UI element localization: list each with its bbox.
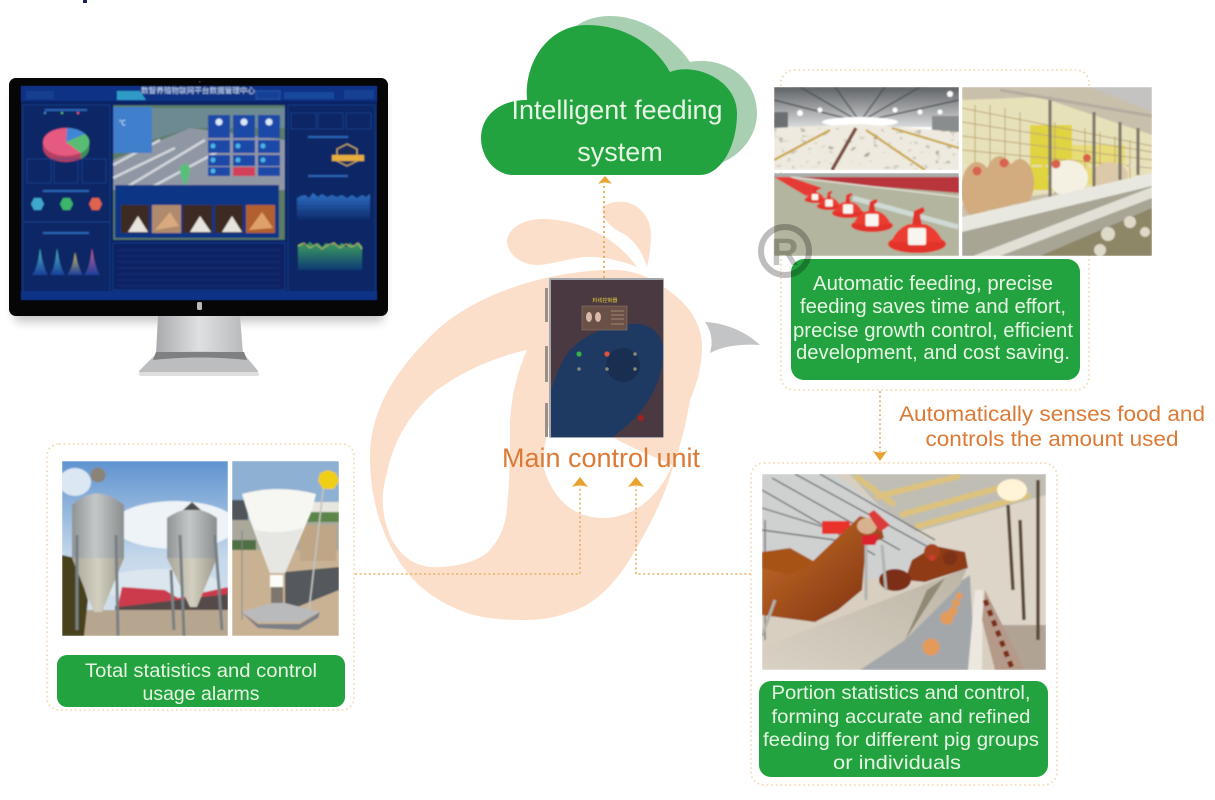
registered trademark mark: [761, 227, 809, 275]
status hexagons: [31, 198, 102, 210]
cloud: intelligent feeding system: [481, 16, 757, 175]
data table: [113, 243, 285, 290]
tile grid: [208, 115, 280, 176]
silo left: [72, 494, 124, 558]
trough: [962, 173, 1152, 232]
label: total statistics: [57, 655, 345, 707]
main control cabinet: [545, 278, 664, 445]
cloud title line 2: system: [577, 137, 663, 167]
dashboard map view: ℃: [119, 119, 126, 127]
indicators and knobs: [576, 351, 644, 421]
monitor bezel: [9, 78, 388, 316]
silo right: [167, 509, 217, 558]
connector: portion unit to main unit: [628, 477, 751, 574]
label: portion statistics: [759, 681, 1048, 777]
map pin: [180, 164, 190, 186]
photo: red pan feeders: [774, 173, 959, 256]
dashboard map view: [113, 105, 285, 240]
top-left cropped glyph: [83, 0, 87, 3]
connector: silos to main unit: [355, 477, 588, 574]
panel: automatic feeding: [774, 70, 1152, 390]
hinges: [545, 288, 548, 437]
hens: [961, 156, 1034, 218]
badge: [332, 144, 364, 166]
main control unit label: Main control unit: [502, 443, 700, 473]
pie chart: [43, 112, 89, 162]
label: automatic feeding: [791, 259, 1080, 380]
label: automatic feeding: development, and cost saving.: [796, 342, 1070, 364]
monitor stand: [139, 316, 259, 376]
connector: main unit to cloud: [598, 176, 612, 280]
monitor logo: [197, 302, 202, 310]
brand logo watermark: [370, 202, 702, 620]
sensing note: Automatically senses food and: [899, 403, 1205, 426]
area chart: [297, 193, 370, 220]
label: portion statistics: feeding for different pig groups: [763, 729, 1039, 751]
photo: hens in cages: [762, 474, 1046, 670]
label: automatic feeding: Automatic feeding, precise: [813, 273, 1053, 295]
label: total statistics: Total statistics and control: [85, 660, 317, 682]
sensing note: controls the amount used: [926, 428, 1178, 451]
photo: feed silos: [62, 461, 228, 636]
photo: dry-wet feeder: [232, 461, 339, 636]
line chart: [298, 242, 362, 270]
monitor with dashboard: [9, 78, 388, 376]
dashboard left column: [23, 105, 110, 292]
dashboard top bar: [21, 85, 377, 101]
cabinet nameplate: 料线控制器: [592, 297, 618, 304]
label: portion statistics: or individuals: [833, 752, 961, 774]
registered trademark mark: R: [771, 232, 799, 274]
photo: broiler house: [774, 87, 959, 170]
cabinet display: [582, 306, 627, 330]
panel: total statistics: [47, 444, 354, 710]
sensing note: [899, 403, 1205, 451]
peak chart: [32, 248, 100, 275]
label: automatic feeding: precise growth control, efficient: [793, 320, 1073, 342]
cage wire: [762, 474, 935, 580]
hen group: [762, 510, 968, 622]
egg trough: [860, 575, 975, 670]
screen: [21, 86, 377, 300]
cloud title: Intelligent feeding: [512, 95, 722, 125]
label: total statistics: usage alarms: [142, 683, 260, 705]
label: portion statistics: forming accurate and refined: [772, 706, 1030, 728]
label: portion statistics: Portion statistics and control,: [772, 682, 1030, 704]
camera panel: [115, 185, 279, 238]
dashboard top bar: 数智养殖物联网平台数据管理中心: [141, 85, 255, 95]
connector: feeding to portion: [873, 391, 887, 461]
stat boxes: [27, 159, 106, 183]
photo: laying hen cages: [962, 87, 1152, 256]
label: automatic feeding: feeding saves time and effort,: [800, 296, 1066, 318]
panel: portion statistics: [751, 463, 1057, 785]
grey crescent mark: [705, 322, 760, 353]
dashboard right column: [288, 105, 375, 292]
